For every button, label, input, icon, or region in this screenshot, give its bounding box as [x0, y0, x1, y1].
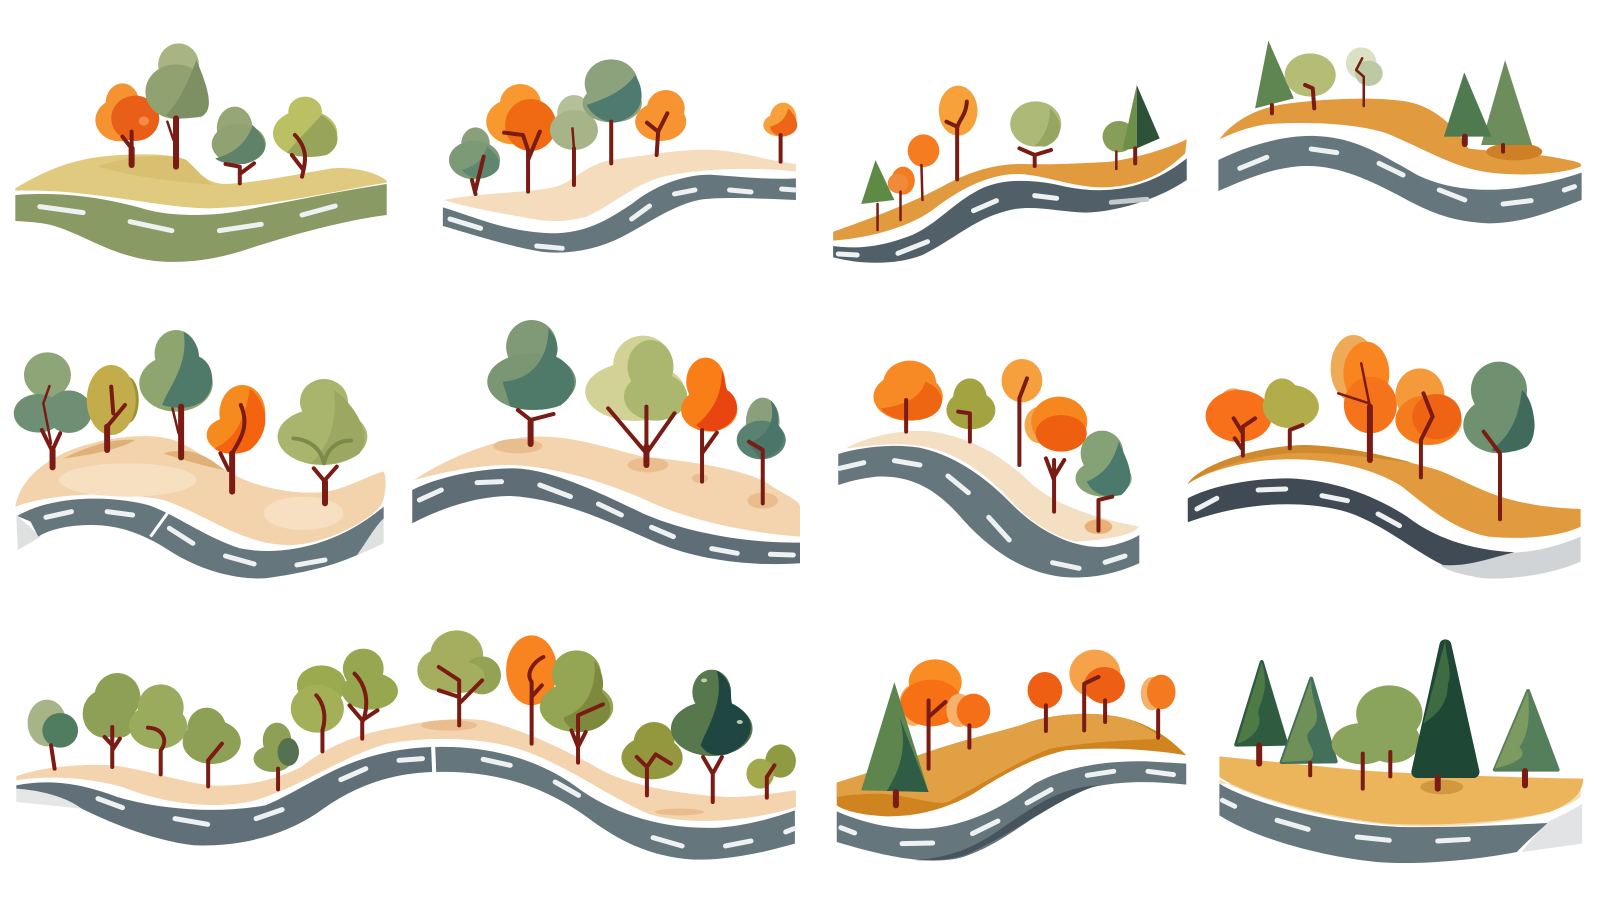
tree: yellow green	[273, 97, 338, 177]
road dashes	[1222, 800, 1468, 841]
panel: dark road below long beige slope	[412, 320, 800, 564]
road	[838, 446, 1139, 578]
road	[1218, 136, 1582, 223]
tree: tall orange	[1002, 359, 1042, 465]
tree: green double-lobe	[14, 352, 92, 467]
tree 6	[291, 665, 346, 751]
tree: small orange	[888, 167, 915, 220]
tree: orange	[635, 90, 686, 155]
panel: orange hill with pine and grey road	[837, 650, 1186, 861]
tree: yellow green	[1285, 53, 1336, 108]
tree: green	[1076, 431, 1132, 534]
road shadow corners	[16, 510, 384, 557]
ground	[1188, 445, 1581, 538]
tree: round green	[1010, 101, 1061, 166]
tree 10	[540, 650, 613, 763]
road	[1188, 478, 1514, 565]
tree: orange	[207, 385, 265, 492]
road dashes	[98, 759, 794, 846]
tree: dark pine	[1236, 662, 1286, 764]
road	[15, 184, 387, 262]
road left section	[16, 747, 432, 845]
road right section	[435, 747, 795, 860]
panel: dark road with orange path rising right	[833, 85, 1187, 263]
ground	[1219, 99, 1581, 174]
tree: right pine	[1495, 691, 1558, 785]
tree 12: dark green	[671, 670, 753, 802]
tree: tall pine	[1481, 60, 1532, 152]
road shadow	[1440, 537, 1581, 579]
tree: pale green	[550, 95, 598, 185]
panel: pine forest with golden ground and road	[1219, 640, 1583, 863]
tree: small red orange	[1028, 672, 1062, 731]
road dashes	[419, 482, 793, 555]
tree: large orange	[1024, 397, 1087, 512]
ground	[444, 150, 796, 221]
tree: orange	[1395, 368, 1462, 477]
road dashes	[46, 512, 325, 565]
road	[443, 175, 796, 253]
tree: teal green	[139, 330, 213, 457]
tree: broad green	[1332, 685, 1422, 789]
ground	[1219, 756, 1583, 826]
road shadow	[1522, 804, 1582, 852]
tree: medium orange	[946, 694, 990, 748]
tree: mustard	[87, 365, 139, 450]
panel: pale path road with six trees	[443, 59, 797, 253]
ground	[833, 139, 1187, 241]
panel: long wavy road with thirteen trees	[16, 630, 796, 860]
tree: big orange	[486, 84, 556, 192]
tree: small green	[449, 127, 500, 194]
panel: dark road with golden slope and grey shadow	[1188, 335, 1581, 579]
tree: tall green	[1463, 362, 1535, 519]
tree 9: orange	[506, 635, 557, 744]
tree 13	[746, 744, 796, 798]
road dashes	[40, 206, 335, 231]
road	[17, 499, 384, 578]
tree: teal green	[487, 320, 576, 444]
panel: steep grey road with five trees	[838, 359, 1139, 578]
tree: tall orange	[939, 86, 978, 179]
road shadow	[16, 789, 82, 809]
tree: olive	[1263, 378, 1319, 448]
road dashes	[838, 196, 1147, 255]
panel: grey road under orange hill with pines	[1218, 41, 1582, 223]
road	[837, 761, 1186, 861]
road dashes	[1197, 489, 1399, 526]
tree: orange red	[681, 358, 737, 482]
tree: tall dark pine	[1417, 640, 1473, 789]
tree 4	[183, 708, 241, 786]
ground	[846, 431, 1139, 542]
tree: pine in front	[861, 682, 929, 805]
ground	[16, 719, 796, 821]
ground	[15, 154, 387, 208]
panel: beige hill with road and five trees	[14, 330, 386, 578]
tree: far right orange	[1141, 675, 1176, 738]
tree 7	[342, 649, 398, 739]
tree 3	[129, 684, 187, 774]
tree: large olive	[278, 379, 367, 503]
ground	[15, 436, 386, 545]
tree: short pine	[1444, 72, 1491, 144]
tree: green and dark pine	[1103, 85, 1160, 169]
road dashes	[450, 189, 795, 248]
tree: medium orange	[908, 134, 939, 200]
road	[833, 158, 1187, 263]
road	[1219, 784, 1547, 863]
tree: small pine	[861, 160, 894, 230]
tree: teal green	[212, 107, 266, 183]
tree 11	[621, 722, 683, 795]
tree: pine left	[1255, 41, 1294, 113]
road dashes	[841, 771, 1173, 844]
ground	[837, 714, 1186, 816]
tree 1	[28, 700, 78, 769]
tree: broad pale olive	[585, 336, 687, 465]
tree: two-stem orange	[1069, 650, 1125, 730]
road dashes	[840, 461, 1125, 568]
tree: pale	[1346, 47, 1383, 106]
tree: teal	[737, 398, 786, 503]
tree: tall green	[145, 43, 209, 167]
tree: far right orange	[763, 103, 797, 162]
tree: round orange	[873, 361, 943, 432]
ground	[414, 436, 800, 537]
tree: green pine	[1282, 679, 1336, 775]
tree: small orange	[1206, 388, 1272, 456]
road	[412, 468, 800, 564]
tree 8	[417, 630, 501, 725]
tree 5	[254, 723, 299, 789]
road dashes	[1240, 149, 1574, 204]
tree: large orange	[899, 659, 962, 769]
tree 2	[83, 673, 140, 767]
tree: teal green	[583, 59, 642, 163]
tree: olive	[946, 378, 995, 442]
tree: tall orange	[1331, 335, 1397, 460]
tree: orange	[95, 83, 159, 165]
panel: olive road with four trees	[15, 43, 387, 262]
